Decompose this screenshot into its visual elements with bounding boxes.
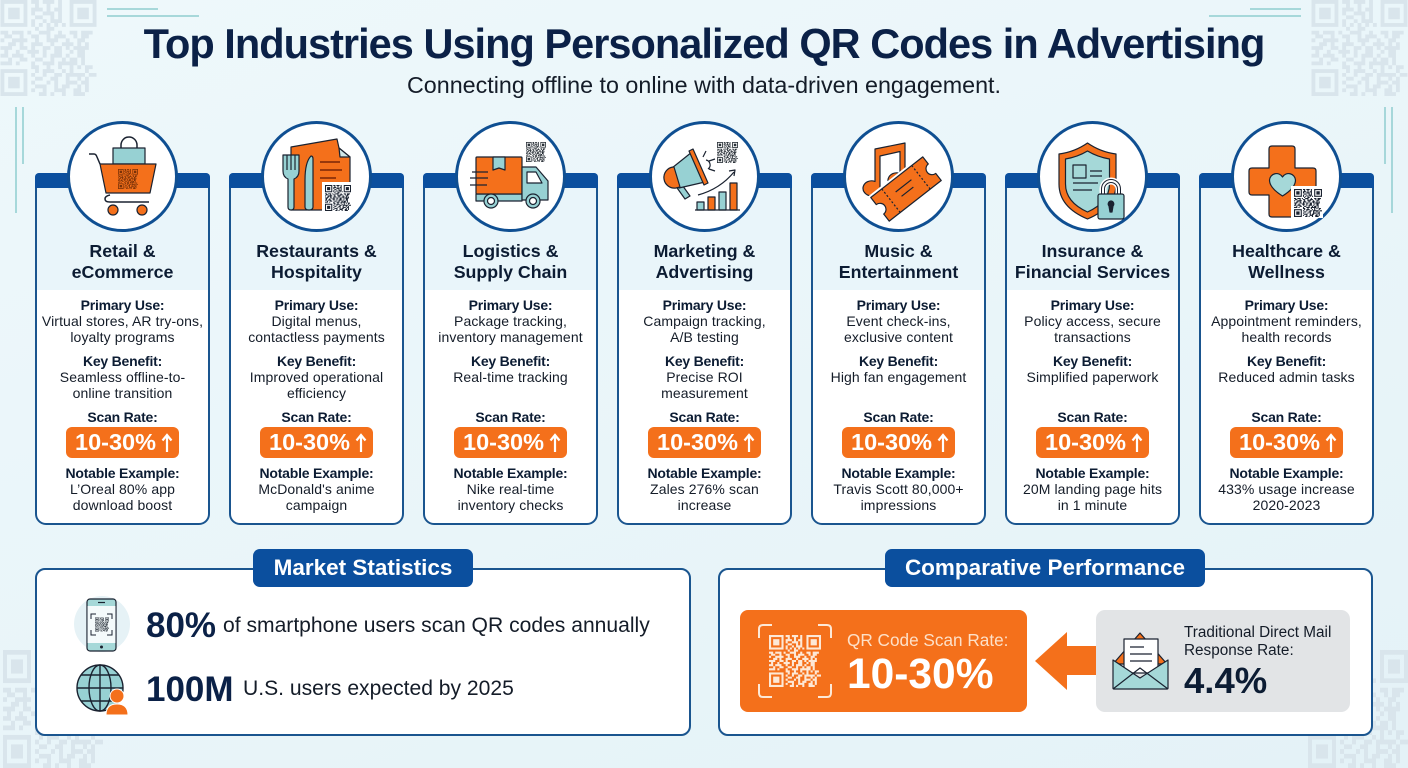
scan rate pill: 10-30% (463, 429, 544, 455)
label: QR Code Scan Rate: (847, 630, 1008, 650)
key benefit: Key Benefit: (1247, 353, 1326, 369)
subtitle: Connecting offline to online with data-driven engagement. (407, 72, 1001, 98)
primary use (42, 297, 203, 345)
background QR pattern: top right (1312, 0, 1408, 96)
key benefit (661, 353, 748, 401)
scan rate pill (648, 427, 761, 458)
background QR pattern: bottom left (3, 650, 103, 768)
heading: Market Statistics (253, 549, 473, 587)
primary use: Campaign tracking, (643, 313, 766, 329)
notable example: Notable Example: (260, 465, 373, 481)
notable example: Notable Example: (1230, 465, 1343, 481)
key benefit: Key Benefit: (277, 353, 356, 369)
heading (839, 241, 958, 282)
panel: Logistics & Supply Chain (423, 121, 598, 525)
heading: Marketing & (654, 241, 755, 261)
key benefit: Reduced admin tasks (1218, 369, 1355, 385)
title: Top Industries Using Personalized QR Codes in Advertising (144, 20, 1264, 67)
key benefit: Seamless offline-to- (60, 369, 185, 385)
key benefit: Key Benefit: (83, 353, 162, 369)
key benefit: Precise ROI (666, 369, 743, 385)
primary use: contactless payments (248, 329, 385, 345)
background QR pattern: top left (0, 0, 96, 96)
key benefit: Key Benefit: (1053, 353, 1132, 369)
panel: Insurance & Financial Services (1005, 121, 1180, 525)
scan rate pill (454, 427, 567, 458)
primary use: Primary Use: (275, 297, 358, 313)
heading (454, 241, 567, 282)
icon: megaphone, growth bars and QR code (649, 121, 760, 232)
panel: Marketing & Advertising (617, 121, 792, 525)
notable example (258, 465, 375, 513)
primary use: Primary Use: (1051, 297, 1134, 313)
notable example: impressions (861, 497, 936, 513)
primary use: Primary Use: (469, 297, 552, 313)
scan rate label: Scan Rate: (1251, 409, 1322, 425)
icon: menu, cutlery and QR code (261, 121, 372, 232)
scan rate pill (1230, 427, 1343, 458)
heading (1000, 241, 1185, 283)
notable example: Notable Example: (842, 465, 955, 481)
icon: phone scanning QR code (72, 594, 132, 654)
primary use: Digital menus, (271, 313, 362, 329)
notable example: Notable Example: (648, 465, 761, 481)
scan rate label: Scan Rate: (1057, 409, 1128, 425)
primary use: Package tracking, (454, 313, 567, 329)
stat: 100M: 100M (146, 670, 234, 709)
key benefit: Key Benefit: (471, 353, 550, 369)
panel: Restaurants & Hospitality (229, 121, 404, 525)
scan rate label: Scan Rate: (669, 409, 740, 425)
heading: Advertising (656, 262, 753, 282)
scan rate pill: 10-30% (657, 429, 738, 455)
heading: Financial Services (1015, 262, 1170, 282)
notable example: in 1 minute (1058, 497, 1127, 513)
heading: Wellness (1248, 262, 1325, 282)
heading: Entertainment (839, 262, 958, 282)
heading: Comparative Performance (885, 549, 1205, 587)
heading: Healthcare & (1232, 241, 1341, 261)
scan rate pill: 10-30% (1239, 429, 1320, 455)
icon: globe with user (74, 662, 130, 718)
value: 10-30% (847, 651, 994, 698)
key benefit (453, 353, 568, 385)
stat text: U.S. users: U.S. users expected by 2025 (243, 677, 514, 700)
primary use: exclusive content (844, 329, 953, 345)
panel: Music & Entertainment (811, 121, 986, 525)
primary use (844, 297, 953, 345)
heading: Restaurants & (256, 241, 377, 261)
notable example: Notable Example: (1036, 465, 1149, 481)
heading: Logistics & (463, 241, 558, 261)
notable example: Notable Example: (454, 465, 567, 481)
key benefit (831, 353, 966, 385)
scan rate pill (66, 427, 179, 458)
stat: 80%: 80% (146, 606, 216, 645)
primary use: Event check-ins, (846, 313, 951, 329)
scan rate label: Scan Rate: (281, 409, 352, 425)
scan rate label: Scan Rate: (863, 409, 934, 425)
heading: Hospitality (271, 262, 362, 282)
scan rate label: Scan Rate: (87, 409, 158, 425)
key benefit: online transition (73, 385, 172, 401)
notable example: L’Oreal 80% app (70, 481, 175, 497)
scan rate pill (1036, 427, 1149, 458)
stat text: smartphone users: of smartphone users scan QR codes annually (223, 614, 650, 637)
heading: eCommerce (72, 262, 173, 282)
primary use: Appointment reminders, (1211, 313, 1362, 329)
icon: medical cross, heart and QR code (1231, 121, 1342, 232)
scan rate pill: 10-30% (75, 429, 156, 455)
key benefit: measurement (661, 385, 748, 401)
primary use (1005, 297, 1180, 345)
notable example: 2020-2023 (1253, 497, 1320, 513)
key benefit (1005, 353, 1180, 385)
primary use: A/B testing (670, 329, 739, 345)
panel: Healthcare & Wellness (1199, 121, 1374, 525)
notable example: download boost (73, 497, 172, 513)
scan rate pill: 10-30% (1045, 429, 1126, 455)
key benefit: Real-time tracking (453, 369, 568, 385)
notable example: Zales 276% scan (650, 481, 759, 497)
notable example (454, 465, 567, 513)
primary use (438, 297, 583, 345)
heading (654, 241, 755, 282)
notable example: increase (678, 497, 731, 513)
heading: Supply Chain (454, 262, 567, 282)
heading (256, 241, 377, 282)
primary use: inventory management (438, 329, 583, 345)
value: 4.4% (1184, 660, 1267, 701)
icon: QR code in scan frame (758, 624, 832, 698)
heading: Music & (864, 241, 933, 261)
key benefit: High fan engagement (831, 369, 966, 385)
notable example (66, 465, 179, 513)
background QR pattern: bottom right (1308, 650, 1408, 768)
heading: Market Statistics: Market Statistics (274, 555, 452, 580)
icon: shopping cart with QR code (67, 121, 178, 232)
notable example: 433% usage increase (1218, 481, 1355, 497)
primary use: transactions (1054, 329, 1131, 345)
key benefit: Key Benefit: (665, 353, 744, 369)
primary use (643, 297, 766, 345)
icon: open envelope (1112, 632, 1170, 692)
key benefit: efficiency (287, 385, 346, 401)
label: Traditional Direct Mail (1184, 624, 1331, 641)
heading: Retail & (89, 241, 156, 261)
primary use: loyalty programs (70, 329, 175, 345)
notable example: Travis Scott 80,000+ (833, 481, 964, 497)
icon: delivery truck with QR code (455, 121, 566, 232)
heading (1194, 241, 1379, 283)
primary use: Primary Use: (663, 297, 746, 313)
notable example (1199, 465, 1374, 513)
key benefit (1199, 353, 1374, 385)
primary use: Primary Use: (81, 297, 164, 313)
key benefit: Simplified paperwork (1027, 369, 1158, 385)
scan rate pill: 10-30% (269, 429, 350, 455)
notable example (833, 465, 964, 513)
primary use: Virtual stores, AR try-ons, (42, 313, 203, 329)
primary use (1199, 297, 1374, 345)
icon: shield and padlock (1037, 121, 1148, 232)
icon: music notes and ticket (843, 121, 954, 232)
primary use: Primary Use: (857, 297, 940, 313)
panel: Market Statistics (35, 568, 691, 736)
label: Response Rate: (1184, 642, 1294, 659)
notable example (1005, 465, 1180, 513)
heading (72, 241, 173, 282)
panel: Retail & eCommerce (35, 121, 210, 525)
notable example: campaign (286, 497, 347, 513)
box: QR code scan rate (740, 610, 1027, 712)
notable example: Nike real-time (467, 481, 554, 497)
scan rate pill: 10-30% (851, 429, 932, 455)
key benefit: Improved operational (250, 369, 383, 385)
box: traditional direct mail (1096, 610, 1350, 712)
primary use: Policy access, secure (1024, 313, 1161, 329)
notable example: McDonald's anime (258, 481, 375, 497)
key benefit: Key Benefit: (859, 353, 938, 369)
key benefit (250, 353, 383, 401)
notable example: Notable Example: (66, 465, 179, 481)
primary use: Primary Use: (1245, 297, 1328, 313)
label (1184, 624, 1331, 660)
scan rate pill (842, 427, 955, 458)
notable example: inventory checks (458, 497, 563, 513)
notable example: 20M landing page hits (1023, 481, 1162, 497)
primary use: health records (1241, 329, 1332, 345)
heading: Insurance & (1042, 241, 1143, 261)
panel: Comparative Performance (718, 568, 1373, 736)
notable example (648, 465, 761, 513)
primary use (248, 297, 385, 345)
scan rate label: Scan Rate: (475, 409, 546, 425)
arrow (1035, 632, 1097, 690)
key benefit (60, 353, 185, 401)
heading: Comparative Performance: Comparative Performance (905, 555, 1185, 580)
scan rate pill (260, 427, 373, 458)
